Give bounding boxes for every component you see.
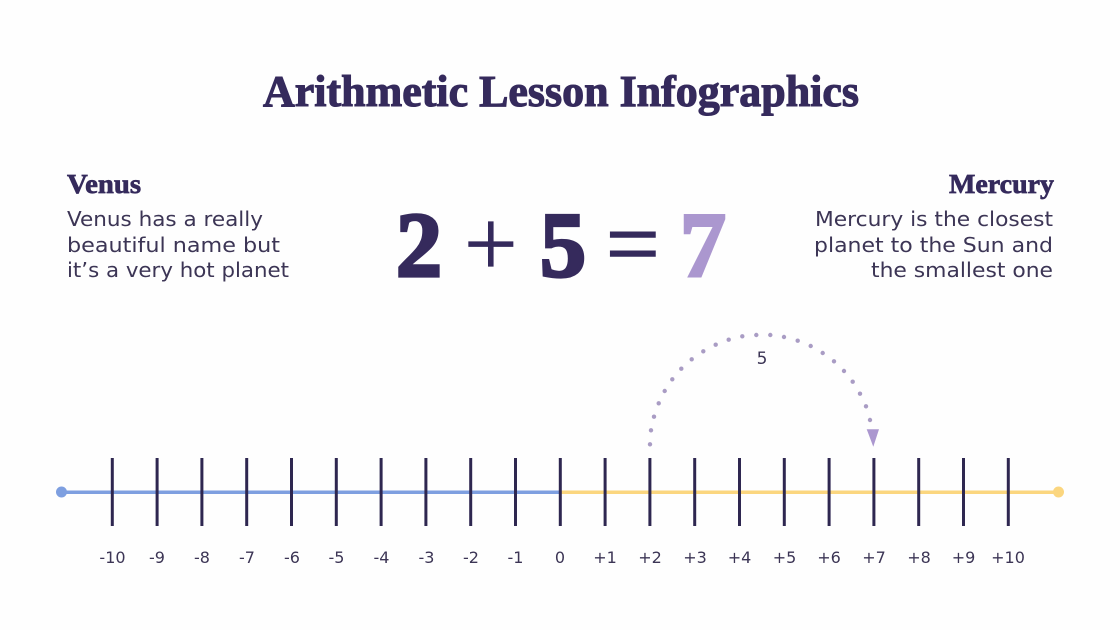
equation: = [606, 191, 660, 297]
title: Arithmetic Lesson Infographics [263, 67, 859, 116]
tick labels: +4 [728, 548, 751, 567]
text block: Mercury description: Mercury is the closest [815, 207, 1053, 231]
tick marks [112, 458, 1008, 526]
arrowhead [867, 429, 879, 447]
left endpoint [56, 486, 67, 498]
text block: Mercury description: the smallest one [871, 258, 1053, 282]
tick labels: -9 [149, 548, 165, 567]
negative axis [62, 490, 560, 494]
equation: 7 [680, 194, 726, 296]
heading: Mercury: Mercury [949, 169, 1055, 199]
tick labels: +1 [593, 548, 617, 567]
dotted jump arc [648, 333, 872, 446]
tick labels: -2 [463, 548, 479, 567]
text block: Venus description: beautiful name but [67, 233, 280, 257]
tick labels: +7 [862, 548, 886, 567]
tick labels: +10 [991, 548, 1025, 567]
heading: Venus: Venus [67, 169, 141, 199]
text block: Venus description: it’s a very hot planet [67, 258, 289, 282]
text block: Mercury description: planet to the Sun and [814, 233, 1053, 257]
tick labels: +2 [638, 548, 662, 567]
tick labels: -6 [284, 548, 300, 567]
tick labels [99, 548, 1025, 567]
tick labels: -4 [374, 548, 389, 567]
text block: Mercury description [814, 207, 1053, 282]
equation: 2 [396, 194, 442, 296]
tick labels: +6 [817, 548, 841, 567]
equation: + [464, 191, 518, 297]
panel: Venus [67, 169, 289, 282]
number line [56, 458, 1064, 567]
tick labels: -7 [239, 548, 255, 567]
tick labels: +5 [773, 548, 796, 567]
tick labels: -10 [99, 548, 126, 567]
text block: Venus description: Venus has a really [67, 207, 263, 231]
equation: 5 [540, 194, 586, 296]
right endpoint [1053, 486, 1064, 498]
tick labels: 0 [555, 548, 565, 567]
panel: Mercury [814, 169, 1055, 282]
positive axis [560, 490, 1058, 494]
jump label: 5 [757, 349, 767, 369]
tick labels: +9 [952, 548, 975, 567]
tick labels: -3 [419, 548, 434, 567]
text block: Venus description [67, 207, 289, 282]
tick labels: -8 [194, 548, 210, 567]
tick labels: -1 [508, 548, 523, 567]
equation [396, 191, 726, 297]
tick labels: +8 [907, 548, 931, 567]
tick labels: -5 [329, 548, 344, 567]
tick labels: +3 [683, 548, 707, 567]
